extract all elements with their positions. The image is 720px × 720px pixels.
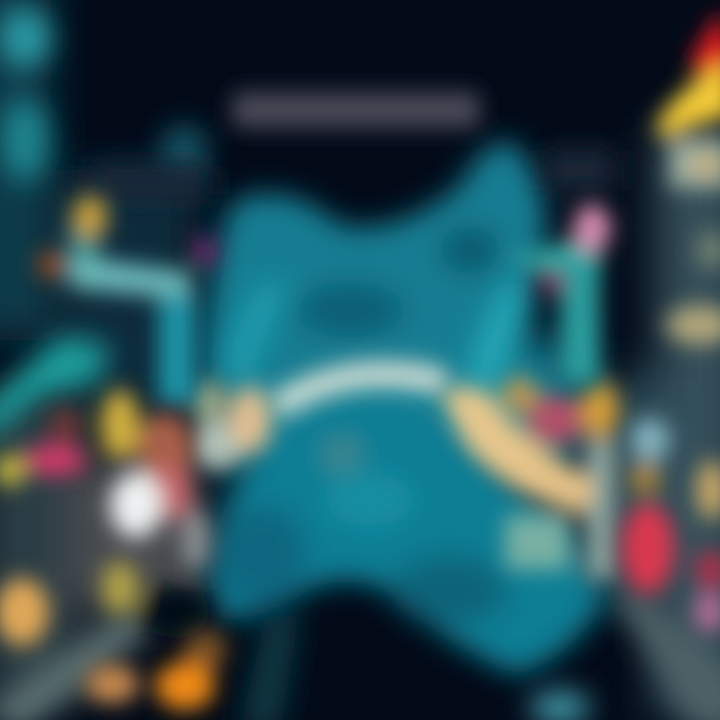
small teal circle [160,126,208,174]
right warm band [440,377,619,580]
diagonal street lines [0,585,720,720]
right city column [600,130,720,720]
bottom orange lights [85,630,227,710]
left chart pieces [37,195,217,405]
left city column [0,0,200,700]
left color cluster [0,389,211,646]
right building lights [621,10,720,632]
left column teal highlights [0,8,110,445]
central light arc [285,374,435,402]
left warm accents [190,380,272,470]
faint left box [90,165,210,195]
faint right box [545,150,615,190]
central teal lower form [209,394,605,675]
title bar [232,92,480,128]
central teal upper form [205,142,546,405]
right chart pieces [505,204,611,385]
bottom teal spot [530,690,590,720]
central teal joining layer [225,340,575,470]
